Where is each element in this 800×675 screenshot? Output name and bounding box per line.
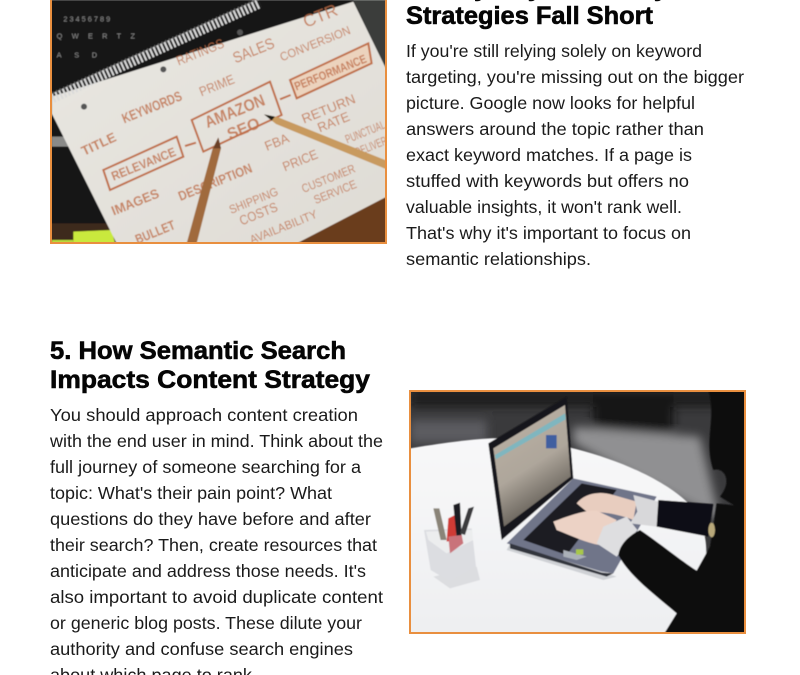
text block: section 4 body [406, 41, 744, 269]
heading: section 5: 5. How Semantic Search [50, 337, 346, 365]
photo: SEO notebook with orange border: PRIME [197, 72, 237, 99]
photo: SEO notebook with orange border: TITLE [79, 130, 119, 159]
text block: section 5 body: also important to avoid duplicate content [50, 587, 383, 607]
photo: SEO notebook with orange border: DELIVERY [353, 132, 394, 159]
text block: section 5 body: questions do they have before and after [50, 509, 371, 529]
photo: SEO notebook with orange border [40, 0, 394, 247]
text block: section 4 body: answers around the topic rather than [406, 119, 704, 139]
photo: SEO notebook with orange border: QWERTZ [57, 31, 144, 40]
text block: section 5 body: topic: What's their pain point? What [50, 483, 332, 503]
photo: SEO notebook with orange border: CTR [300, 0, 341, 32]
text block: section 4 body: That's why it's important to focus on [406, 223, 691, 243]
photo: SEO notebook with orange border: RELEVANCE [109, 145, 178, 184]
heading: section 5 [50, 337, 370, 394]
text block: section 4 body: stuffed with keywords but offers no [406, 171, 689, 191]
photo: SEO notebook with orange border: PERFORMANCE [292, 52, 369, 93]
photo: SEO notebook with orange border: AMAZON [202, 91, 268, 132]
photo: SEO notebook with orange border: RETURN [299, 91, 358, 126]
photo: SEO notebook with orange border: 2 3 4 5 6 7 8 9 [63, 15, 110, 24]
text block: section 5 body: with the end user in mind. Think about the [49, 431, 383, 451]
text block: section 4 body: targeting, you're missing out on the bigger [406, 67, 744, 87]
photo: SEO notebook with orange border: SERVICE [312, 177, 359, 207]
photo: SEO notebook with orange border: CONVERSION [278, 23, 353, 64]
text block: section 5 body [49, 405, 383, 675]
text block: section 5 body: authority and confuse search engines [50, 639, 353, 659]
text block: section 4 body: picture. Google now looks for helpful [406, 93, 695, 113]
photo: SEO notebook with orange border: COSTS [237, 199, 280, 228]
text block: section 4 body: valuable insights, it won't rank well. [406, 197, 682, 217]
text block: section 5 body: full journey of someone searching for a [50, 457, 361, 477]
heading: section 4: Strategies Fall Short [406, 2, 654, 30]
photo: SEO notebook with orange border: CUSTOMER [300, 161, 358, 196]
text block: section 4 body: If you're still relying solely on keyword [406, 41, 702, 61]
photo: SEO notebook with orange border: PUNCTUAL [343, 118, 387, 146]
text block: section 5 body: You should approach content creation [50, 405, 358, 425]
photo: SEO notebook with orange border: RATE [315, 109, 352, 135]
text block: section 4 body: exact keyword matches. If a page is [406, 145, 692, 165]
photo: SEO notebook with orange border: FBA [262, 130, 291, 154]
photo: SEO notebook with orange border: SALES [230, 35, 277, 67]
text block: section 5 body: anticipate and address those needs. It's [50, 561, 366, 581]
photo: SEO notebook with orange border: AVAILABILITY [248, 207, 319, 247]
photo: SEO notebook with orange border: IMAGES [109, 186, 161, 218]
photo: SEO notebook with orange border: RATINGS [174, 36, 226, 68]
photo: SEO notebook with orange border: SHIPPING [227, 184, 280, 217]
text block: section 5 body: or generic blog posts. These dilute your [50, 613, 362, 633]
photo: SEO notebook with orange border: BULLET [133, 217, 177, 247]
photo: SEO notebook with orange border: DESCRIPTION [176, 161, 254, 204]
photo: SEO notebook with orange border: KEYWORDS [119, 88, 184, 126]
photo: SEO notebook with orange border: PRICE [280, 147, 320, 174]
text block: section 5 body: their search? Then, create resources that [50, 535, 377, 555]
photo: hands typing on laptop with orange border [410, 390, 747, 635]
photo: SEO notebook with orange border: ASD [57, 50, 110, 59]
heading: section 5: Impacts Content Strategy [50, 366, 370, 394]
text block: section 4 body: semantic relationships. [406, 249, 591, 269]
photo: SEO notebook with orange border: SEO [225, 115, 263, 144]
